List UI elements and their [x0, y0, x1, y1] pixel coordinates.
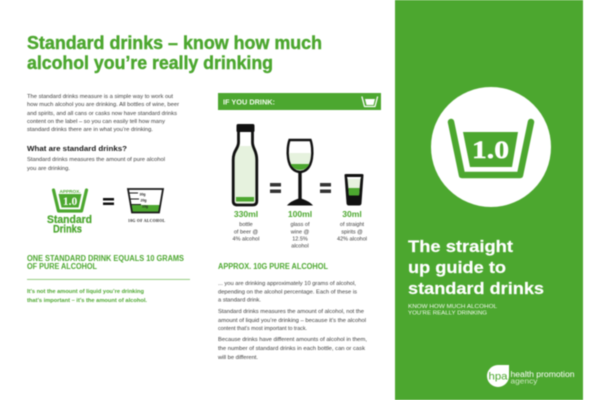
cover subtitle: KNOW HOW MUCH ALCOHOL [408, 304, 497, 310]
label: wine: glass of [291, 222, 310, 228]
label: spirits: of straight [340, 222, 365, 228]
icon: measuring beaker: 30g [140, 192, 146, 196]
explanation text: ... you are drinking approximately 10 grams of alcohol, [218, 281, 356, 287]
intro text [27, 94, 179, 133]
explanation text: a standard drink. [218, 298, 261, 304]
green callout: one standard drink: OF PURE ALCOHOL [27, 262, 97, 271]
icon: measuring beaker [128, 189, 165, 223]
label: beer: 4% alcohol [233, 236, 259, 242]
explanation text [217, 281, 367, 361]
explanation text: amount of liquid you’re drinking – because it’s the alcohol [218, 318, 366, 324]
label: spirits [337, 209, 367, 242]
banner: if you drink: IF YOU DRINK: [223, 98, 275, 106]
explanation text: depending on the alcohol percentage. Each of these is [218, 290, 357, 296]
explanation text: the number of standard drinks in each bottle, can or cask [218, 346, 365, 352]
label: beer: 330ml [234, 209, 258, 219]
intro text: how much alcohol you are drinking. All bottles of wine, beer [27, 102, 179, 108]
equals sign [270, 183, 281, 193]
icon: standard drinks logo: Standard [47, 214, 92, 226]
explanation text: content that’s most important to track. [218, 326, 307, 332]
explanation text: Standard drinks measures the amount of alcohol, not the [218, 309, 364, 315]
icon: standard drinks logo: Drinks [53, 224, 82, 236]
intro text: The standard drinks measure is a simple way to work out [27, 94, 173, 100]
icon: wine glass [287, 140, 313, 206]
logo: health promotion agency: health promotion [510, 370, 574, 379]
cover subtitle [408, 304, 497, 316]
label: wine: alcohol [291, 244, 309, 250]
label: wine: wine @ [290, 230, 310, 236]
icon: measuring beaker: 10G OF ALCOHOL [128, 219, 165, 223]
heading: what are standard drinks: What are standard drinks? [27, 144, 127, 153]
definition text: you are drinking. [27, 166, 70, 172]
cover title: standard drinks [408, 280, 544, 298]
cover title: up guide to [408, 259, 506, 277]
icon: measuring beaker: 20g [140, 198, 147, 202]
label: beer [233, 209, 259, 242]
green callout: one standard drink [27, 254, 184, 271]
green note [27, 289, 147, 304]
icon: white circle with cup [431, 87, 551, 207]
logo: health promotion agency [487, 365, 574, 387]
green callout: one standard drink: ONE STANDARD DRINK EQUALS 10 GRAMS [27, 254, 184, 263]
icon: standard drinks logo [47, 189, 92, 236]
heading: approx 10g pure alcohol: APPROX. 10G PURE ALCOHOL [218, 262, 328, 271]
icon: standard drinks logo: 1.0 [63, 196, 77, 208]
cover title [408, 238, 544, 298]
label: spirits: 42% alcohol [337, 236, 367, 242]
icon: beer bottle [233, 124, 257, 205]
intro text: standard drinks there are in what you’re drinking. [27, 127, 153, 133]
label: spirits: 30ml [342, 209, 362, 219]
divider [27, 278, 190, 281]
label: wine: 12.5% [292, 236, 308, 242]
icon: standard drinks logo: APPROX. [60, 189, 80, 194]
title: alcohol you’re really drinking [27, 53, 273, 73]
panel: green cover [395, 0, 583, 400]
label: wine [288, 209, 312, 250]
cover subtitle: YOU’RE REALLY DRINKING [408, 310, 487, 316]
title: Standard drinks – know how much [27, 33, 322, 53]
intro text: content on the label – so you can easily tell how many [27, 119, 165, 125]
label: spirits: spirits @ [341, 230, 363, 236]
label: wine: 100ml [288, 209, 312, 219]
banner: if you drink [218, 93, 381, 110]
green note: It’s not the amount of liquid you’re drinking [27, 289, 145, 295]
equals sign [103, 198, 114, 205]
intro text: and spirits, and all cans or casks now have standard drinks [27, 111, 177, 117]
label: beer: bottle [239, 222, 253, 228]
logo: health promotion agency: agency [510, 376, 538, 386]
title [27, 33, 322, 73]
label: beer: of beer @ [234, 230, 259, 236]
icon: shot glass [344, 174, 364, 206]
cover title: The straight [408, 238, 514, 256]
equals sign [320, 183, 331, 193]
icon: measuring beaker: 10g [142, 204, 148, 208]
green note: that’s important – it’s the amount of alcohol. [27, 298, 147, 304]
explanation text: will be different. [217, 355, 258, 361]
explanation text: Because drinks have different amounts of alcohol in them, [218, 337, 367, 343]
definition text [27, 157, 165, 172]
logo: health promotion agency: hpa [488, 370, 508, 382]
definition text: Standard drinks measures the amount of pure alcohol [27, 157, 165, 163]
icon: white circle with cup: 1.0 [472, 137, 509, 164]
